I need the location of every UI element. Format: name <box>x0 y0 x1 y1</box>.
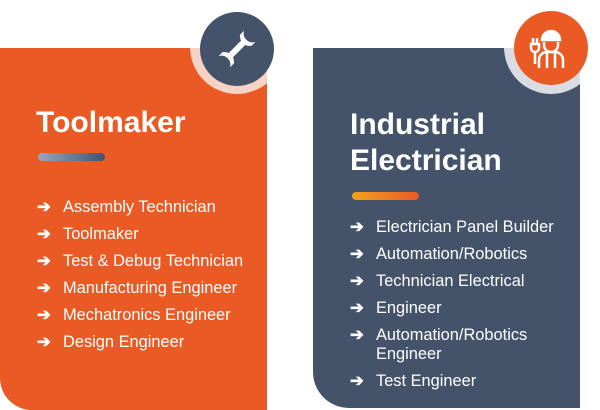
list: electrician careers: Automation/Robotics <box>376 245 527 263</box>
panel: industrial electrician <box>313 48 580 408</box>
list: toolmaker careers: Toolmaker <box>63 225 139 243</box>
list: electrician careers: Automation/Robotics <box>376 326 527 344</box>
list: toolmaker careers: Mechatronics Engineer <box>63 306 231 324</box>
list: electrician careers <box>350 218 554 390</box>
list: electrician careers: ➔ <box>350 272 364 290</box>
list: electrician careers: Engineer <box>376 345 442 363</box>
heading: Industrial Electrician: Electrician <box>350 144 502 177</box>
panel: toolmaker <box>0 48 267 410</box>
icon halo <box>504 0 598 94</box>
list: electrician careers: Electrician Panel Builder <box>376 218 554 236</box>
heading: Toolmaker: Toolmaker <box>36 106 186 139</box>
list: toolmaker careers: ➔ <box>37 252 51 270</box>
list: electrician careers: ➔ <box>350 299 364 317</box>
icon: wrench <box>200 12 274 86</box>
list: electrician careers: ➔ <box>350 326 364 344</box>
list: toolmaker careers: ➔ <box>37 306 51 324</box>
icon: electrician worker <box>514 11 588 85</box>
list: toolmaker careers: Design Engineer <box>63 333 184 351</box>
list: electrician careers: Technician Electrical <box>376 272 524 290</box>
accent bar <box>38 153 105 161</box>
list: electrician careers: Engineer <box>376 299 442 317</box>
list: toolmaker careers: Manufacturing Engineer <box>63 279 237 297</box>
list: electrician careers: ➔ <box>350 372 364 390</box>
list: electrician careers: Test Engineer <box>376 372 476 390</box>
accent bar <box>352 192 419 200</box>
heading: Industrial Electrician <box>350 108 502 177</box>
list: toolmaker careers <box>37 198 243 351</box>
icon halo <box>190 0 284 94</box>
list: toolmaker careers: Assembly Technician <box>63 198 216 216</box>
list: toolmaker careers: ➔ <box>37 198 51 216</box>
list: electrician careers: ➔ <box>350 245 364 263</box>
heading: Industrial Electrician: Industrial <box>350 108 485 141</box>
list: toolmaker careers: ➔ <box>37 225 51 243</box>
list: toolmaker careers: ➔ <box>37 279 51 297</box>
list: toolmaker careers: ➔ <box>37 333 51 351</box>
list: electrician careers: ➔ <box>350 218 364 236</box>
list: toolmaker careers: Test & Debug Technician <box>63 252 243 270</box>
